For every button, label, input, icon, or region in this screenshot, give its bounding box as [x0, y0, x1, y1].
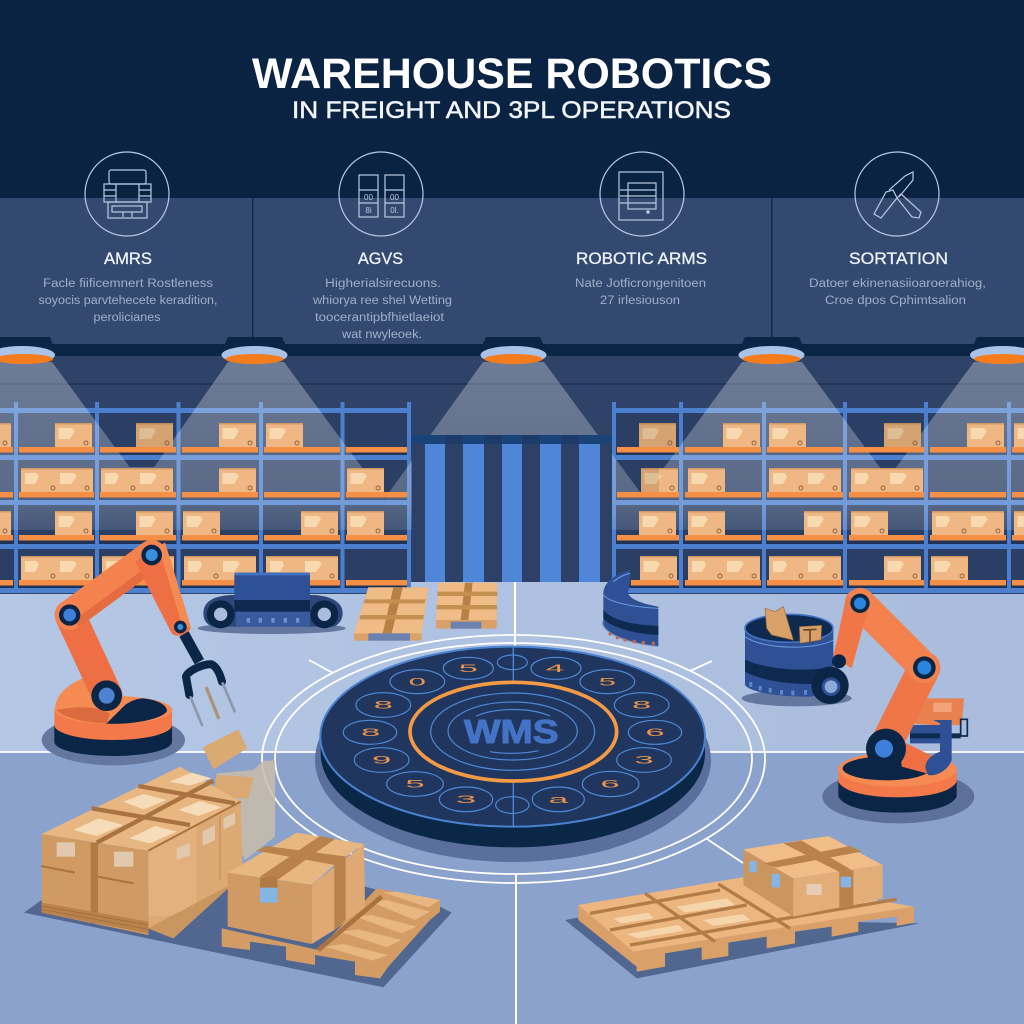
title: IN FREIGHT AND 3PL OPERATIONS [292, 97, 731, 124]
panel: AMRs: Facle fiificemnert Rostleness [43, 278, 213, 290]
node ring: 9 [372, 755, 392, 767]
ceiling beam [0, 344, 1024, 356]
arm links [884, 668, 924, 748]
WMS hub [320, 647, 705, 847]
panel: Sortation [809, 152, 986, 307]
panel: Robotic Arms: Nate Jotficrongenitoen [575, 278, 706, 290]
panel: AMRs [38, 152, 218, 324]
grab unit [912, 698, 964, 725]
title [252, 50, 772, 124]
node ring: 3 [634, 755, 654, 767]
upper floor [0, 582, 1024, 752]
tape on boxes [97, 781, 213, 843]
icon: AGV units: 8i [365, 206, 372, 215]
shelving rack: left frame [0, 402, 411, 593]
icon: AGV units: 0l. [390, 206, 399, 215]
icon: AGV units [339, 152, 423, 236]
node ring: 8 [374, 700, 393, 712]
falling parcel [203, 729, 247, 769]
pale labels [73, 773, 222, 843]
node ring: 5 [599, 676, 616, 688]
warehouse back wall [0, 356, 1024, 596]
panel: Robotic Arms: 27 irlesiouson [600, 295, 680, 307]
sortation conveyor segment [602, 570, 658, 647]
node ring: 0 [409, 676, 426, 688]
icon: AGV units: 00 [390, 193, 399, 202]
node ring: 8 [361, 727, 381, 739]
panel: AGVs: toocerantipbfhietlaeiot [315, 312, 445, 324]
loading dock door [412, 435, 612, 585]
lower floor [0, 752, 1024, 1024]
title: WAREHOUSE ROBOTICS [252, 50, 772, 98]
WMS label: WMS [464, 714, 559, 751]
panel: AGVs: AGVS [358, 249, 403, 268]
panel: AGVs: whiorya ree shel Wetting [312, 295, 452, 307]
panel: Sortation: Datoer ekinenasiioaroerahiog, [809, 278, 986, 290]
box [743, 849, 793, 917]
node ring: 5 [405, 779, 425, 791]
robotic arm: right [822, 594, 974, 823]
pallets: back row [354, 583, 497, 641]
node ring: 6 [600, 779, 620, 791]
box stack [42, 834, 148, 935]
panel: Robotic Arms [575, 152, 707, 307]
pallet with box [222, 833, 440, 978]
node ring: 4 [546, 663, 565, 675]
parcels [765, 607, 793, 640]
robotic arm: left [42, 543, 235, 765]
header background [0, 0, 1024, 198]
translucent wrap [213, 761, 275, 860]
panel: Robotic Arms: ROBOTIC ARMS [576, 249, 707, 268]
stacked boxes and pallet: lower left [24, 729, 452, 987]
floor guide lines [0, 582, 1024, 1024]
icon: AGV units: 00 [364, 193, 373, 202]
panel: AMRs: AMRS [104, 249, 152, 268]
icon: sorting gripper [855, 152, 939, 236]
platform shadow [315, 658, 711, 862]
panel: AMRs: soyocis parvtehecete keradition, [38, 295, 218, 307]
node ring [343, 655, 682, 813]
arm joints [141, 545, 162, 565]
panel: Sortation: SORTATION [849, 249, 948, 268]
panel: AGVs: Higherialsirecuons. [325, 278, 441, 290]
panel dividers [252, 198, 254, 344]
icon: robotic arm screen [600, 152, 684, 236]
pallet with box: lower right [565, 836, 920, 978]
node ring: 6 [645, 727, 665, 739]
shelves and boxes: right rack [617, 423, 1024, 586]
AMR cart with parcels [742, 607, 852, 706]
node ring: a [548, 794, 569, 806]
icon: AMR robot [85, 152, 169, 236]
node ring: 3 [456, 794, 477, 806]
light beams [0, 362, 1024, 530]
panel: AGVs: wat nwyleoek. [341, 329, 422, 341]
node ring: 8 [632, 700, 652, 712]
orange ring [410, 682, 617, 781]
gripper [184, 634, 235, 725]
node ring: 5 [459, 663, 478, 675]
shelves and boxes: left rack [0, 423, 407, 586]
panel row background [0, 198, 1024, 344]
panel: AMRs: perolicianes [94, 312, 161, 324]
panel: Sortation: Croe dpos Cphimtsalion [825, 295, 966, 307]
ceiling lights [0, 337, 1024, 364]
panel: AGVs [312, 152, 452, 341]
AGV vehicle [198, 573, 346, 634]
shelving rack: right frame [612, 402, 1024, 593]
